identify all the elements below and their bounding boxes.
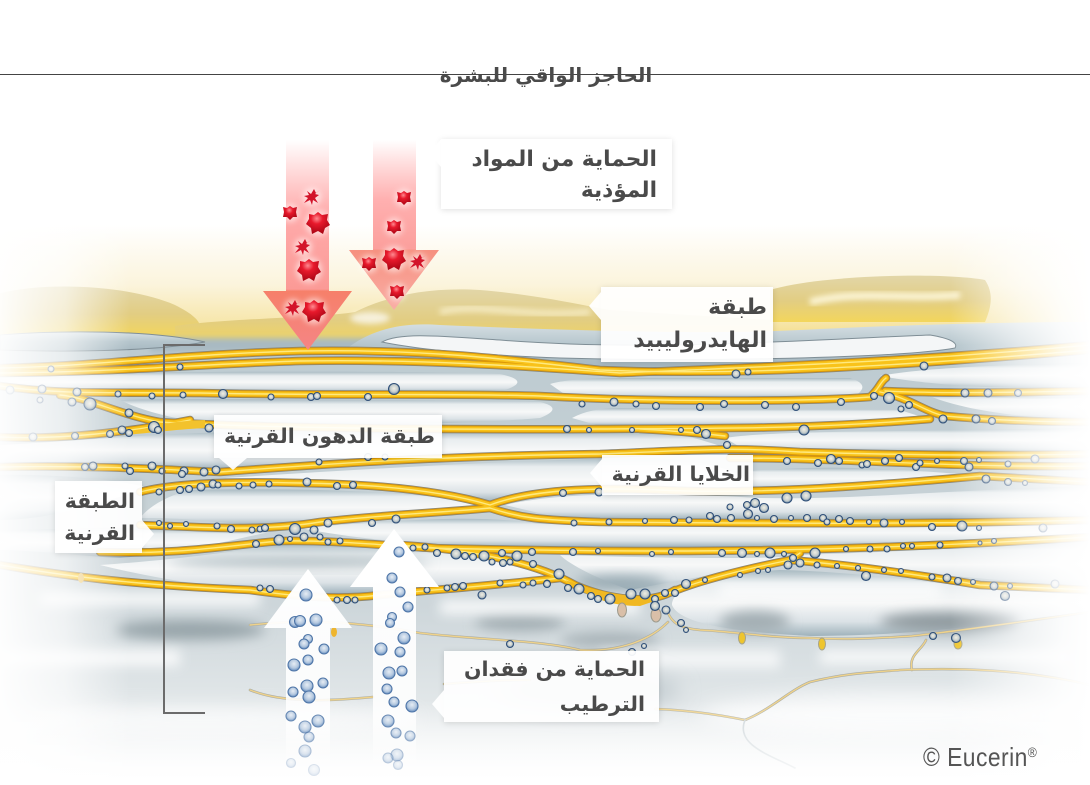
callout: protection from harmful substances xyxy=(441,139,672,209)
lipid lamellae yellow bands xyxy=(0,345,1090,768)
callout: hydrolipid layer: طبقة xyxy=(708,295,767,320)
callout: protection from moisture loss: الترطيب xyxy=(560,692,645,716)
water bubbles in the lipid bands xyxy=(6,362,1059,656)
callout: stratum corneum xyxy=(55,481,142,553)
arrow: harmful substances right xyxy=(349,140,439,310)
callout: corneocytes: الخلايا القرنية xyxy=(612,462,750,486)
background: hydrolipid yellow glow xyxy=(0,225,1090,345)
corneocyte cells xyxy=(0,363,1090,636)
callout: corneal lipid layer: طبقة الدهون القرنية xyxy=(224,424,435,448)
callout: stratum corneum: القرنية xyxy=(64,521,135,545)
lower tissue shading xyxy=(0,557,1090,737)
callout: hydrolipid layer: الهايدروليبيد xyxy=(633,328,767,353)
callout: protection from harmful substances: المؤذية xyxy=(581,178,657,203)
arrow: harmful substances left xyxy=(263,140,352,350)
skin base tissue xyxy=(0,335,1090,785)
stratum corneum bracket xyxy=(164,345,205,713)
lipid droplets xyxy=(78,573,962,650)
stratum corneum top cells xyxy=(0,322,1090,368)
side and bottom fade xyxy=(0,225,1090,785)
title: الحاجز الواقي للبشرة xyxy=(440,63,652,87)
title rule xyxy=(0,74,1090,76)
arrow: water loss right xyxy=(350,529,439,770)
callout: protection from harmful substances: الحماية من المواد xyxy=(471,147,657,172)
callout: corneal lipid layer xyxy=(214,415,442,458)
callout: corneocytes xyxy=(602,455,753,495)
callout: stratum corneum: الطبقة xyxy=(65,489,135,513)
callout: protection from moisture loss xyxy=(444,651,659,722)
callout: hydrolipid layer xyxy=(601,287,773,362)
callout: protection from moisture loss: الحماية من فقدان xyxy=(464,657,645,681)
copyright: © Eucerin® xyxy=(923,742,1037,772)
arrow: water loss left xyxy=(264,569,352,780)
hydrolipid film blobs xyxy=(0,276,991,345)
